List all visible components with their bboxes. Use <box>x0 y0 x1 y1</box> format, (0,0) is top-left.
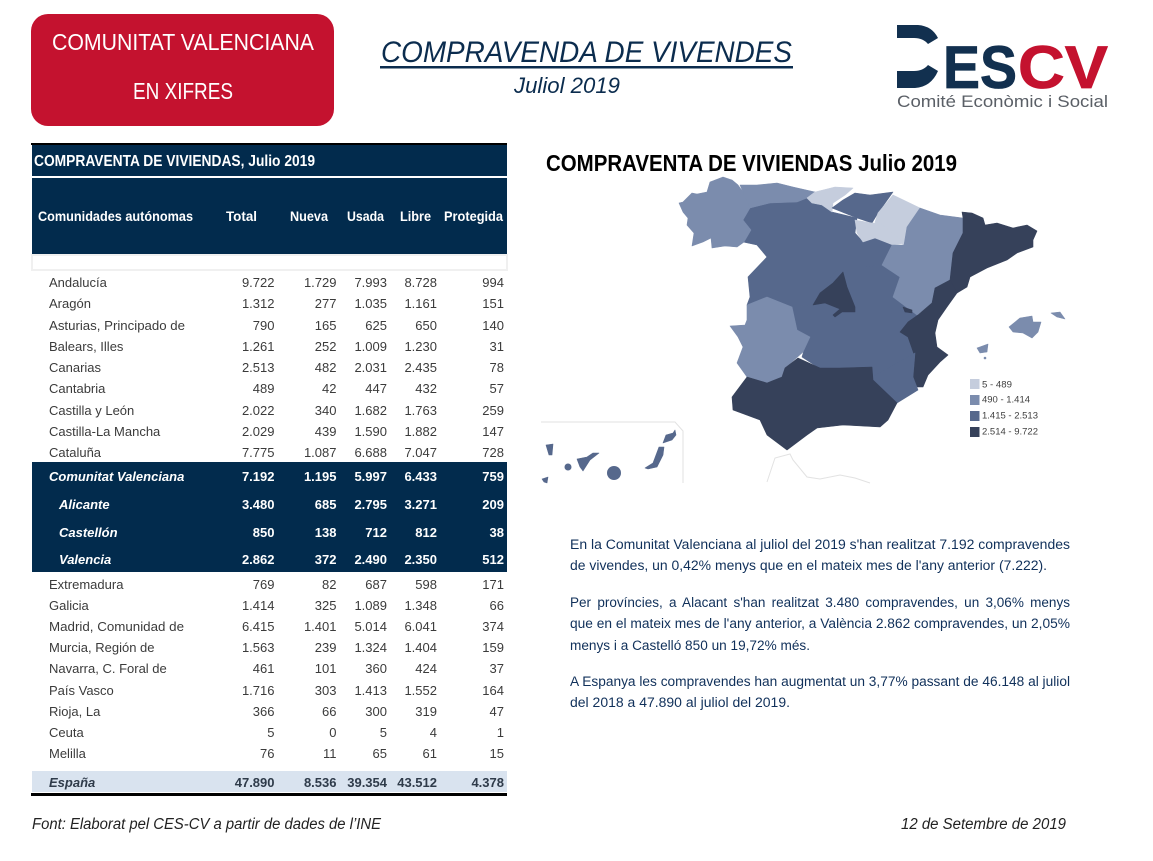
row: Asturias <box>49 318 504 333</box>
row: Aragón: Aragón <box>49 296 91 311</box>
row: Navarra: Navarra, C. Foral de <box>49 661 167 676</box>
row: Comunitat Valenciana: 1.195 <box>304 469 336 484</box>
row: Valencia: 2.350 <box>404 552 437 567</box>
row: Cantabria: Cantabria <box>49 381 106 396</box>
map legend: 490 - 1.414 <box>982 394 1030 406</box>
row: Navarra: 424 <box>415 661 437 676</box>
row: Valencia: 512 <box>482 552 504 567</box>
row: Melilla: 76 <box>260 746 274 761</box>
date: 12 de Setembre de 2019 <box>901 816 1066 833</box>
row: Cataluña <box>49 445 504 460</box>
row: Galicia: 1.089 <box>354 598 387 613</box>
table title band: COMPRAVENTA DE VIVIENDAS, Julio 2019 <box>34 153 315 170</box>
row: Aragón: 1.312 <box>242 296 274 311</box>
row: Castilla y León: 1.682 <box>354 403 387 418</box>
row: Ceuta: 4 <box>430 725 437 740</box>
row: Balears: Balears, Illes <box>49 339 124 354</box>
row: Extremadura: 82 <box>322 577 336 592</box>
row: Alicante: 3.271 <box>404 497 437 512</box>
row: Navarra: 461 <box>253 661 274 676</box>
row: País Vasco: 1.716 <box>242 683 274 698</box>
row: Andalucía: 8.728 <box>404 275 437 290</box>
row: Madrid: 5.014 <box>354 619 387 634</box>
table column headers: Total <box>226 208 257 224</box>
row: Alicante <box>58 497 504 512</box>
map legend <box>970 379 1038 438</box>
row: Castellón: 850 <box>253 525 274 540</box>
row: Madrid: 6.041 <box>404 619 437 634</box>
table column headers: Libre <box>400 208 431 224</box>
row: Balears: 252 <box>315 339 336 354</box>
region: Navarra <box>875 195 920 245</box>
row: Ceuta: 1 <box>497 725 504 740</box>
row: Castilla-La Mancha: 2.029 <box>242 424 274 439</box>
row: España total: 43.512 <box>397 775 437 790</box>
table column headers: Usada <box>347 208 384 224</box>
row: Cantabria: 432 <box>415 381 437 396</box>
logo: CES CV: Comité Econòmic i Social <box>897 92 1108 111</box>
row: Aragón <box>49 296 504 311</box>
table column headers: Comunidades autónomas <box>38 208 193 224</box>
region: Madrid <box>813 272 855 317</box>
text block: commentary: de vivendes, un 0,42% menys que en el mateix mes de l'any anterior (7.222). <box>570 558 1047 573</box>
region: País Vasco <box>832 192 893 223</box>
row: Extremadura <box>49 577 504 592</box>
row: Extremadura: Extremadura <box>49 577 124 592</box>
row: Murcia: 1.563 <box>242 640 274 655</box>
row: Canarias <box>49 360 504 375</box>
logo: CES CV <box>897 25 1108 111</box>
row: Comunitat Valenciana: 7.192 <box>242 469 274 484</box>
row: Murcia: 239 <box>315 640 336 655</box>
row: Balears: 1.261 <box>242 339 274 354</box>
row: Aragón: 1.035 <box>354 296 387 311</box>
row: País Vasco: País Vasco <box>49 683 114 698</box>
row: Comunitat Valenciana: 6.433 <box>404 469 437 484</box>
source note: Font: Elaborat pel CES-CV a partir de dades de l’INE <box>32 816 382 833</box>
row: Galicia: 1.414 <box>242 598 274 613</box>
row: Cataluña: 6.688 <box>354 445 387 460</box>
row: Balears: 31 <box>490 339 504 354</box>
row: Balears: 1.230 <box>404 339 437 354</box>
row: Melilla: 65 <box>373 746 387 761</box>
text block: commentary: En la Comunitat Valenciana al juliol del 2019 s'han realitzat 7.192 compravendes <box>570 537 1070 552</box>
row: Navarra <box>49 661 504 676</box>
title: Juliol 2019 <box>513 73 620 98</box>
row: Canarias: 2.031 <box>354 360 387 375</box>
row: Castilla-La Mancha: 1.590 <box>354 424 387 439</box>
row: Andalucía: 994 <box>482 275 504 290</box>
row: Andalucía: Andalucía <box>49 275 108 290</box>
row: Asturias: 650 <box>415 318 437 333</box>
Canary Islands inset frame <box>541 422 683 483</box>
row: Murcia: 159 <box>482 640 504 655</box>
map legend: 5 - 489 <box>982 380 1012 390</box>
row: Cataluña: Cataluña <box>49 445 102 460</box>
row: España total: 4.378 <box>471 775 504 790</box>
row: Extremadura: 171 <box>482 577 504 592</box>
region: Castilla y León <box>743 198 892 307</box>
row: Navarra: 37 <box>490 661 504 676</box>
text block: commentary: del 2018 a 47.890 al juliol del 2019. <box>570 695 790 710</box>
row: Melilla <box>49 746 504 761</box>
row: Melilla: 15 <box>490 746 504 761</box>
row: Valencia: 2.862 <box>242 552 274 567</box>
region: Extremadura <box>730 297 810 383</box>
region: Aragón <box>882 208 963 315</box>
text block: commentary: Per províncies, a Alacant s'han realitzat 3.480 compravendes, un 3,06% menys <box>570 595 1070 610</box>
text block: commentary: menys i a Castelló 850 un 19,72% més. <box>570 638 810 653</box>
row: Aragón: 151 <box>482 296 504 311</box>
row: Comunitat Valenciana: 5.997 <box>354 469 387 484</box>
Balearic Islands <box>977 312 1065 359</box>
row: Castilla y León: 340 <box>315 403 336 418</box>
row: Comunitat Valenciana <box>49 469 504 484</box>
North Africa coastline <box>767 454 870 483</box>
row: Navarra: 360 <box>365 661 387 676</box>
map heading: COMPRAVENTA DE VIVIENDAS Julio 2019 <box>546 150 957 176</box>
row: Galicia <box>49 598 504 613</box>
row: España total: 8.536 <box>304 775 336 790</box>
row: Melilla: 11 <box>323 746 336 761</box>
row: Castilla y León: 2.022 <box>242 403 274 418</box>
title <box>380 36 793 98</box>
row: Rioja: Rioja, La <box>49 704 101 719</box>
row: Castellón: 138 <box>315 525 336 540</box>
row: Valencia <box>59 552 504 567</box>
row: Balears: 1.009 <box>354 339 387 354</box>
badge: Comunitat Valenciana en xifres: COMUNITAT VALENCIANA <box>52 29 315 55</box>
row: Alicante: 3.480 <box>242 497 274 512</box>
row: Canarias: Canarias <box>49 360 102 375</box>
row: Galicia: 66 <box>490 598 504 613</box>
badge: Comunitat Valenciana en xifres: EN XIFRES <box>133 78 233 104</box>
row: Castellón: 812 <box>415 525 437 540</box>
row: Aragón: 277 <box>315 296 336 311</box>
row: Castilla-La Mancha: 1.882 <box>404 424 437 439</box>
region: Andalucía <box>732 358 897 450</box>
table column headers <box>32 178 507 254</box>
region: La Rioja <box>855 220 905 245</box>
row: Canarias: 78 <box>490 360 504 375</box>
highlighted band: Comunitat Valenciana <box>32 462 507 572</box>
row: Asturias: 165 <box>315 318 336 333</box>
row: Asturias: 140 <box>482 318 504 333</box>
row: Ceuta: Ceuta <box>49 725 84 740</box>
row: Castellón <box>59 525 504 540</box>
row: Cataluña: 7.775 <box>242 445 274 460</box>
choropleth map of Spain <box>541 177 1065 483</box>
row: Cantabria: 42 <box>322 381 336 396</box>
badge: Comunitat Valenciana en xifres <box>31 14 334 126</box>
row: Galicia: 1.348 <box>404 598 437 613</box>
row: Castellón: 712 <box>365 525 387 540</box>
row: Melilla: 61 <box>423 746 437 761</box>
row: Alicante: Alicante <box>58 497 110 512</box>
row: Andalucía: 1.729 <box>304 275 336 290</box>
row: Asturias: 625 <box>365 318 387 333</box>
table title band <box>31 143 507 176</box>
row: Valencia: Valencia <box>59 552 111 567</box>
row: Valencia: 372 <box>315 552 336 567</box>
row: Castilla y León <box>49 403 504 418</box>
row: Comunitat Valenciana: 759 <box>482 469 504 484</box>
row: Cantabria: 447 <box>365 381 387 396</box>
Canary Islands <box>542 430 676 483</box>
row: Extremadura: 769 <box>253 577 274 592</box>
row: Alicante: 209 <box>482 497 504 512</box>
row: Castellón: Castellón <box>59 525 118 540</box>
row: Galicia: Galicia <box>49 598 90 613</box>
row: Asturias: 790 <box>253 318 274 333</box>
row: Andalucía: 9.722 <box>242 275 274 290</box>
row: Castilla-La Mancha: 439 <box>315 424 336 439</box>
region: Castilla-La Mancha <box>792 265 918 377</box>
row: Ceuta <box>49 725 504 740</box>
row: Cantabria <box>49 381 504 396</box>
row: Comunitat Valenciana: Comunitat Valenciana <box>49 469 184 484</box>
region: Cantabria <box>807 187 853 212</box>
row: Galicia: 325 <box>315 598 336 613</box>
row: Murcia: Murcia, Región de <box>49 640 154 655</box>
row: España total: 39.354 <box>347 775 388 790</box>
text block: commentary: A Espanya les compravendes han augmentat un 3,77% passant de 46.148 al juliol <box>570 674 1070 689</box>
row: Murcia: 1.404 <box>404 640 437 655</box>
row: Valencia: 2.490 <box>354 552 387 567</box>
row: Madrid: Madrid, Comunidad de <box>49 619 184 634</box>
row: Castilla y León: Castilla y León <box>49 403 134 418</box>
enclave: Rincón de Ademuz <box>903 307 912 313</box>
title: COMPRAVENDA DE VIVENDES <box>381 36 792 69</box>
logo: CES CV: ES <box>943 34 1017 101</box>
row: País Vasco: 303 <box>315 683 336 698</box>
row: País Vasco: 164 <box>482 683 504 698</box>
row: Madrid: 1.401 <box>304 619 336 634</box>
row: Castilla y León: 259 <box>482 403 504 418</box>
text block: commentary <box>570 537 1070 710</box>
row: Rioja: 319 <box>415 704 437 719</box>
row: Madrid <box>49 619 504 634</box>
row: Canarias: 2.435 <box>404 360 437 375</box>
row: Extremadura: 598 <box>415 577 437 592</box>
row: Andalucía <box>49 275 504 290</box>
blank row under headers <box>32 255 507 270</box>
row: País Vasco: 1.552 <box>404 683 437 698</box>
row: Ceuta: 5 <box>267 725 274 740</box>
row: Melilla: Melilla <box>49 746 87 761</box>
row: Ceuta: 0 <box>329 725 336 740</box>
region: Cataluña <box>950 212 1037 293</box>
row: Castellón: 38 <box>490 525 504 540</box>
row: España total: 47.890 <box>235 775 274 790</box>
panel: table <box>31 143 507 796</box>
logo: CES CV: CV <box>1018 34 1108 101</box>
text block: commentary: que en el mateix mes de l'any anterior, a València 2.862 compravendes, un 2,05% <box>570 616 1070 631</box>
map legend: 1.415 - 2.513 <box>982 410 1038 422</box>
map legend: 2.514 - 9.722 <box>982 426 1038 438</box>
row: Extremadura: 687 <box>365 577 387 592</box>
row: Cataluña: 1.087 <box>304 445 336 460</box>
region: Asturias <box>740 183 815 208</box>
table column headers: Protegida <box>444 208 503 224</box>
row: País Vasco: 1.413 <box>354 683 387 698</box>
region: Comunitat Valenciana <box>900 280 957 387</box>
row: Cantabria: 489 <box>253 381 274 396</box>
row: Alicante: 2.795 <box>354 497 387 512</box>
row: País Vasco <box>49 683 504 698</box>
row: Navarra: 101 <box>315 661 336 676</box>
row: España total: España <box>49 775 95 790</box>
row: Castilla-La Mancha: Castilla-La Mancha <box>49 424 161 439</box>
row: Canarias: 2.513 <box>242 360 274 375</box>
row: Andalucía: 7.993 <box>354 275 387 290</box>
row: Castilla-La Mancha <box>49 424 504 439</box>
row: Rioja: 66 <box>322 704 336 719</box>
row: Cataluña: 7.047 <box>404 445 437 460</box>
row: Cantabria: 57 <box>490 381 504 396</box>
row: Canarias: 482 <box>315 360 336 375</box>
table column headers: Nueva <box>290 208 328 224</box>
region: Murcia <box>872 353 918 403</box>
row: Cataluña: 728 <box>482 445 504 460</box>
row: Madrid: 6.415 <box>242 619 274 634</box>
row: Madrid: 374 <box>482 619 504 634</box>
row: España total <box>31 771 507 796</box>
row: Alicante: 685 <box>315 497 336 512</box>
row: Rioja: 366 <box>253 704 274 719</box>
row: Murcia <box>49 640 504 655</box>
row: Asturias: Asturias, Principado de <box>49 318 185 333</box>
region: Galicia <box>679 177 751 248</box>
row: Ceuta: 5 <box>380 725 387 740</box>
row: Rioja: 300 <box>365 704 387 719</box>
row: Aragón: 1.161 <box>404 296 437 311</box>
row: Rioja: 47 <box>490 704 504 719</box>
row: Castilla-La Mancha: 147 <box>482 424 504 439</box>
row: Castilla y León: 1.763 <box>404 403 437 418</box>
row: Rioja <box>49 704 504 719</box>
row: Balears <box>49 339 504 354</box>
row: Murcia: 1.324 <box>354 640 387 655</box>
